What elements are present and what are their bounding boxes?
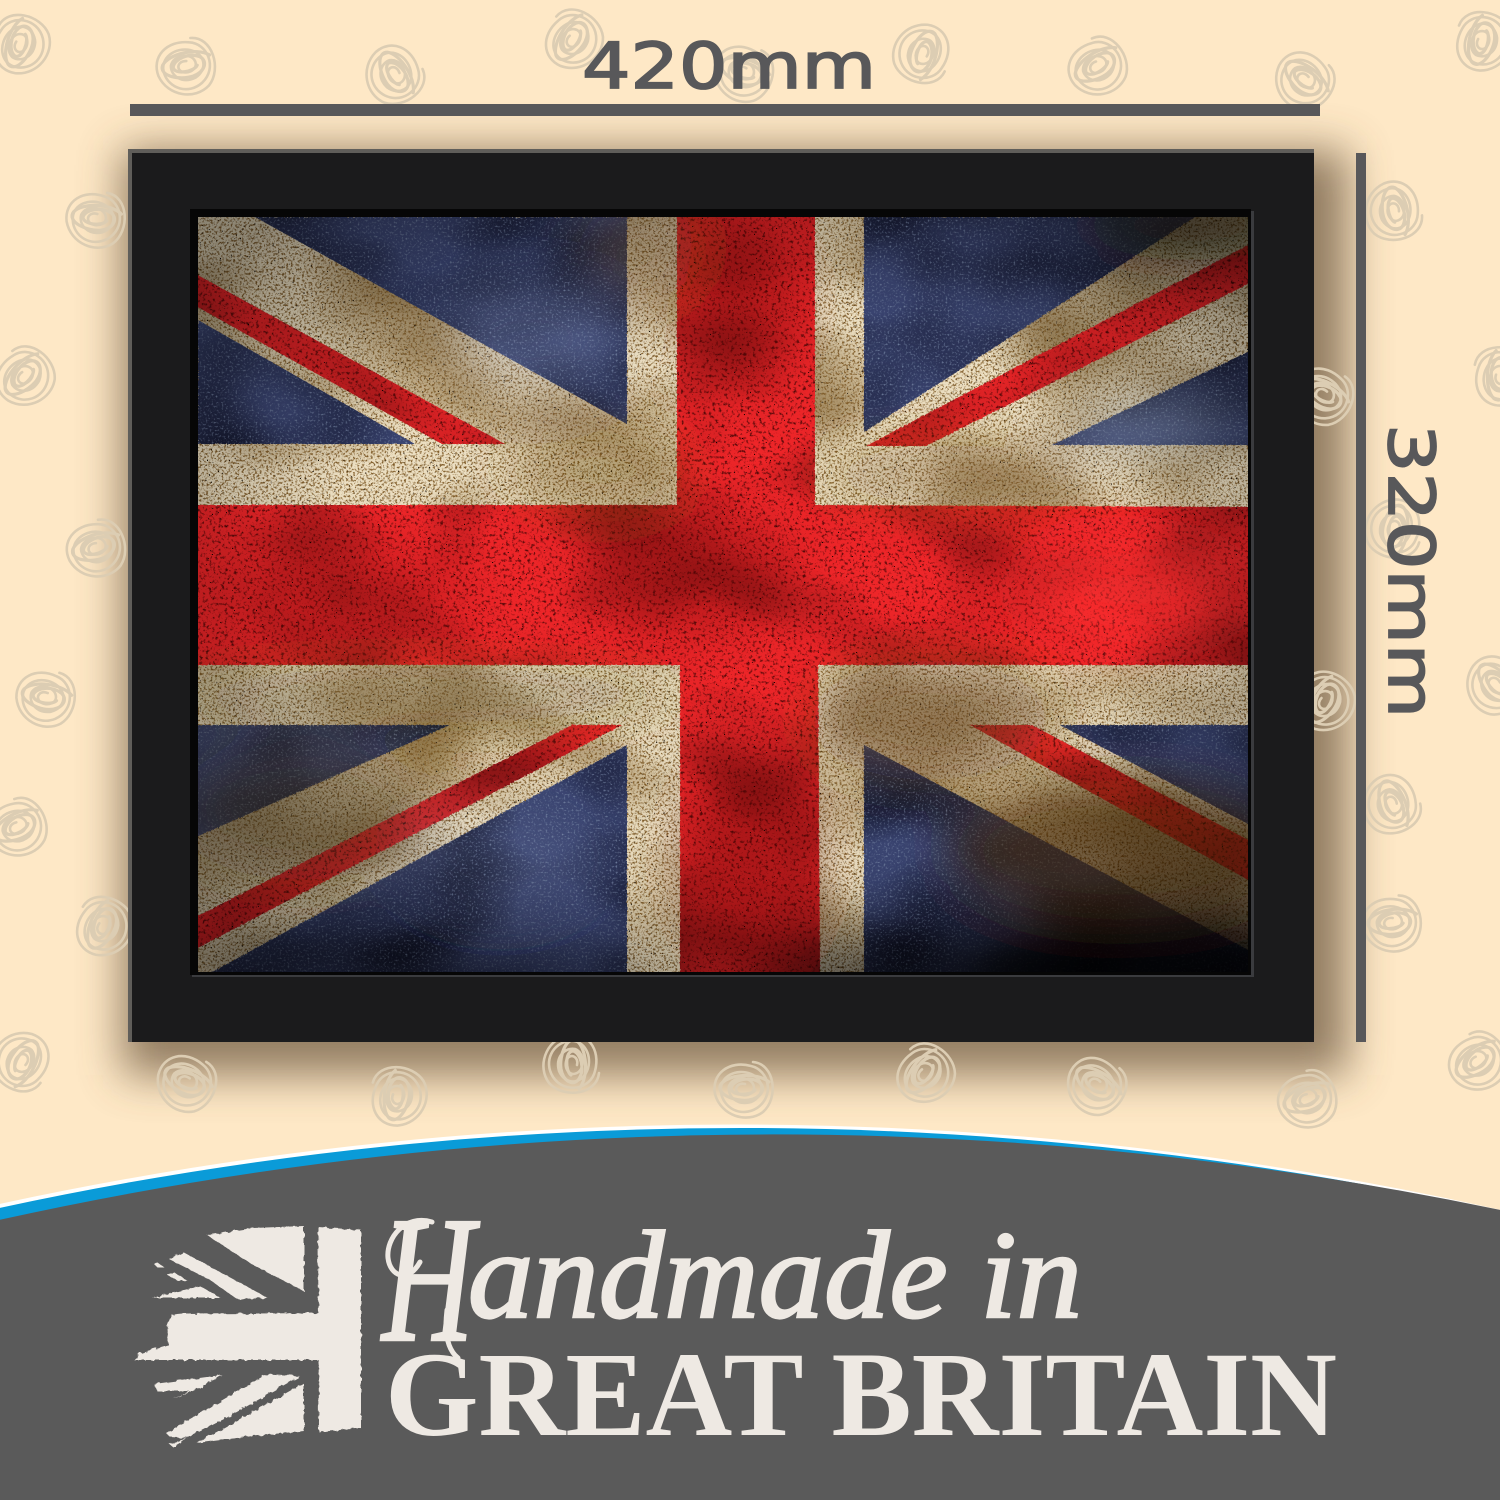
- aged lighting patches: [198, 217, 1248, 972]
- script heading: Handmade in: andmade in: [468, 1207, 1082, 1345]
- heading: GREAT BRITAIN: GREAT BRITAIN: [385, 1328, 1337, 1462]
- width dimension: 420mm: 420mm: [582, 30, 876, 103]
- decorative swash on the script heading: [388, 1220, 458, 1358]
- vignette: [198, 217, 1248, 972]
- red diagonals and cross: [194, 213, 1252, 976]
- bottom banner: [0, 1124, 1500, 1500]
- height dimension: 320mm: 320mm: [1374, 424, 1447, 718]
- icon: distressed union flag half: [134, 1226, 361, 1447]
- background scribble pattern: [0, 0, 1500, 1136]
- white banner edge: [0, 1124, 1500, 1230]
- script heading: Handmade in: H: [381, 1180, 480, 1379]
- grey banner shape: [0, 1134, 1500, 1500]
- Union Jack flag artwork: [198, 217, 1248, 972]
- black picture frame: [128, 149, 1314, 1042]
- frame drop shadow: [122, 150, 1348, 1075]
- cream cross and diagonals: [190, 210, 1256, 980]
- blue fields: [194, 217, 1252, 976]
- height dimension: 320mm: [1356, 153, 1447, 1042]
- width dimension: 420mm: [130, 30, 1320, 116]
- blue banner edge: [0, 1128, 1500, 1230]
- script heading: Handmade in: [381, 1180, 1082, 1379]
